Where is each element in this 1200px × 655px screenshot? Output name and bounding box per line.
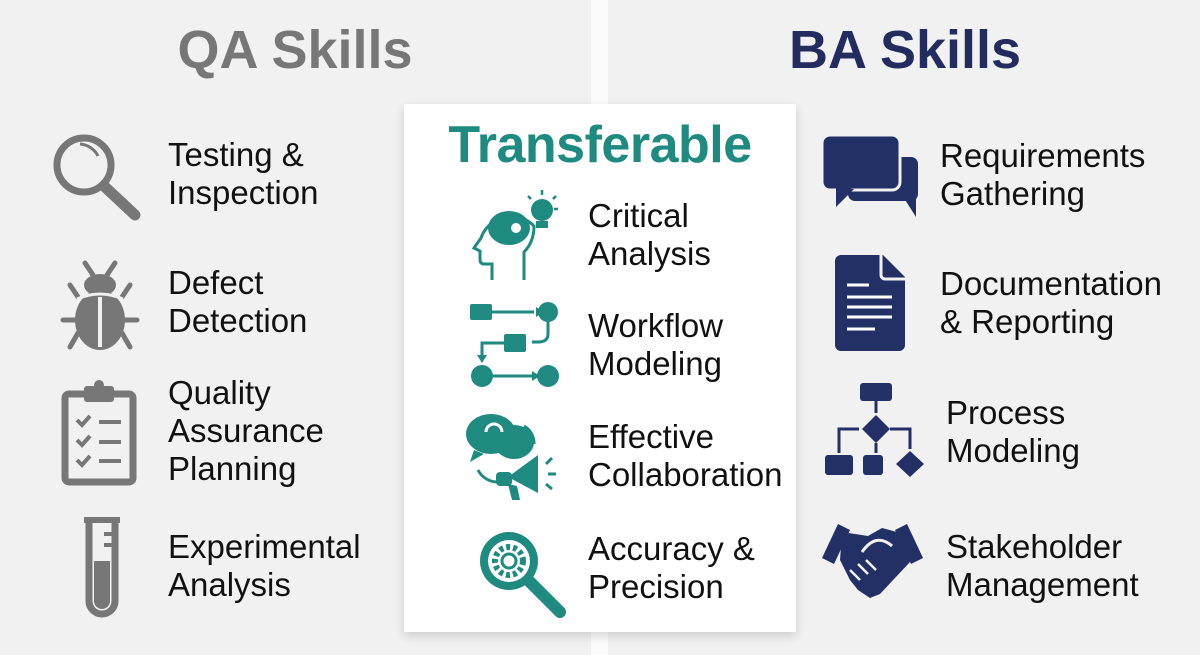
text: Effective Collaboration bbox=[588, 418, 782, 493]
text: Stakeholder Management: Stakeholder bbox=[946, 528, 1122, 565]
text: Testing & Inspection bbox=[168, 136, 318, 211]
text: Experimental Analysis: Analysis bbox=[168, 566, 291, 603]
text: Stakeholder Management bbox=[946, 528, 1139, 603]
icon: document bbox=[835, 255, 905, 351]
text: Documentation & Reporting bbox=[940, 265, 1162, 340]
text: Process Modeling bbox=[946, 394, 1080, 469]
text: Critical Analysis: Analysis bbox=[588, 235, 711, 272]
text: Testing & Inspection: Inspection bbox=[168, 174, 318, 211]
text: Defect Detection: Defect bbox=[168, 264, 263, 301]
text: Critical Analysis bbox=[588, 197, 711, 272]
heading: Transferable: Transferable bbox=[448, 116, 752, 174]
panel: QA skills bbox=[54, 134, 361, 618]
text: Process Modeling: Process bbox=[946, 394, 1065, 431]
text: Experimental Analysis bbox=[168, 528, 361, 603]
text: Process Modeling: Modeling bbox=[946, 432, 1080, 469]
text: Quality Assurance Planning: Planning bbox=[168, 450, 296, 487]
title: BA Skills: BA Skills bbox=[789, 20, 1021, 80]
text: Documentation & Reporting: Documentation bbox=[940, 265, 1162, 302]
text: Accuracy & Precision: Precision bbox=[588, 568, 724, 605]
icon: magnifier bbox=[54, 134, 140, 220]
icon: handshake bbox=[822, 524, 923, 598]
text: Workflow Modeling: Modeling bbox=[588, 345, 722, 382]
text: Accuracy & Precision: Accuracy & bbox=[588, 530, 755, 567]
text: Experimental Analysis: Experimental bbox=[168, 528, 361, 565]
text: Requirements Gathering: Gathering bbox=[940, 175, 1085, 212]
icon: collaboration bbox=[466, 414, 556, 500]
text: Documentation & Reporting: & Reporting bbox=[940, 303, 1114, 340]
text: Accuracy & Precision bbox=[588, 530, 755, 605]
text: Defect Detection: Detection bbox=[168, 302, 307, 339]
icon: brain with bulb bbox=[472, 190, 558, 280]
icon: speech bubbles bbox=[824, 136, 918, 217]
icon: flowchart bbox=[825, 383, 924, 477]
text: Testing & Inspection: Testing & bbox=[168, 136, 304, 173]
text: Effective Collaboration: Collaboration bbox=[588, 456, 782, 493]
divider stripe bbox=[591, 0, 608, 655]
icon: workflow bbox=[470, 302, 559, 387]
icon: test tube bbox=[84, 517, 120, 618]
text: Stakeholder Management: Management bbox=[946, 566, 1139, 603]
panel: transferable bbox=[404, 104, 796, 632]
text: Requirements Gathering: Requirements bbox=[940, 137, 1145, 174]
panel: BA skills bbox=[822, 136, 1162, 603]
text: Workflow Modeling: Workflow bbox=[588, 307, 723, 344]
title: QA Skills: QA Skills bbox=[177, 20, 413, 80]
text: Requirements Gathering bbox=[940, 137, 1145, 212]
text: Critical Analysis: Critical bbox=[588, 197, 689, 234]
text: Quality Assurance Planning bbox=[168, 374, 324, 487]
text: Defect Detection bbox=[168, 264, 307, 339]
icon: bug bbox=[60, 260, 140, 350]
text: Effective Collaboration: Effective bbox=[588, 418, 714, 455]
text: Quality Assurance Planning: Quality bbox=[168, 374, 271, 411]
icon: clipboard bbox=[62, 380, 136, 486]
text: Quality Assurance Planning: Assurance bbox=[168, 412, 324, 449]
icon: accuracy magnifier bbox=[480, 532, 566, 618]
text: Workflow Modeling bbox=[588, 307, 724, 382]
